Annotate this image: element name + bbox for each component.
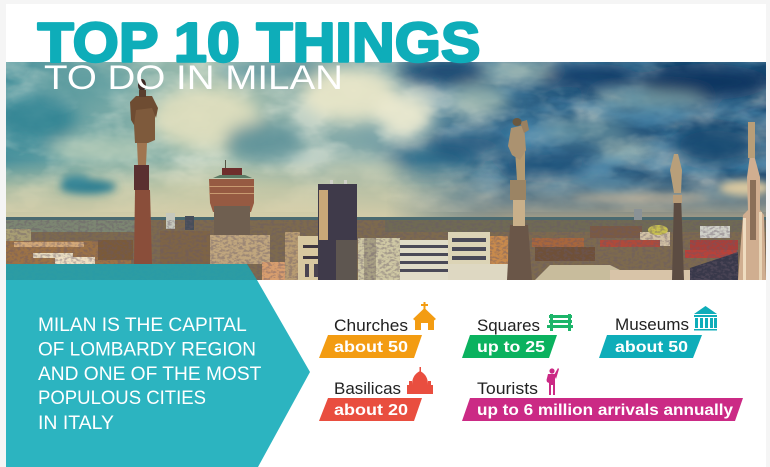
stat: museums: Museums xyxy=(615,316,689,334)
stat: basilicas xyxy=(319,367,433,421)
subtitle: TO DO IN MILAN xyxy=(44,59,343,97)
gothic spire: far right xyxy=(738,122,766,280)
Velasca tower xyxy=(209,160,254,235)
intro text: AND ONE OF THE MOST xyxy=(38,363,261,385)
icon: bench xyxy=(547,314,573,331)
dark cloud texture on the right xyxy=(422,62,766,206)
city texture xyxy=(6,220,766,280)
statue and spire: right xyxy=(670,154,684,280)
icon: church xyxy=(413,302,436,330)
panel: Milan skyline photo xyxy=(0,60,770,280)
pale cloud texture xyxy=(6,62,766,212)
title: TOP 10 THINGS xyxy=(38,10,480,74)
stat: basilicas: Basilicas xyxy=(334,380,401,398)
statue and spire: centre right xyxy=(507,118,532,280)
stat: tourists xyxy=(462,368,743,421)
stat: basilicas: about 20 xyxy=(334,402,408,419)
intro text: POPULOUS CITIES xyxy=(38,387,206,409)
stat: museums xyxy=(599,306,717,358)
stat: churches xyxy=(319,302,436,358)
stat: museums: about 50 xyxy=(615,339,688,356)
intro text: OF LOMBARDY REGION xyxy=(38,338,256,360)
icon: basilica xyxy=(407,367,433,394)
stat: churches: Churches xyxy=(334,317,408,335)
stat: tourists: Tourists xyxy=(477,380,538,398)
stat: squares: up to 25 xyxy=(477,339,545,356)
horizon haze, warm left xyxy=(6,162,489,217)
page edge right of photo xyxy=(766,0,770,467)
stat: squares: Squares xyxy=(477,317,540,335)
horizon haze, grey right xyxy=(414,174,766,217)
intro text: MILAN IS THE CAPITAL xyxy=(38,314,247,336)
pale foreground buildings xyxy=(298,232,690,280)
stat: tourists: up to 6 million arrivals annually xyxy=(477,402,733,419)
panel: intro arrow xyxy=(6,264,310,467)
icon: tourist with raised arm xyxy=(546,368,559,395)
statue and spire: left xyxy=(130,79,158,264)
stat: squares xyxy=(462,314,573,358)
modern tower block xyxy=(318,180,357,280)
city skyline xyxy=(6,209,766,280)
intro text: IN ITALY xyxy=(38,412,114,434)
translucent arrow top over photo xyxy=(6,264,257,280)
icon: museum xyxy=(694,306,717,330)
stat: churches: about 50 xyxy=(334,339,408,356)
